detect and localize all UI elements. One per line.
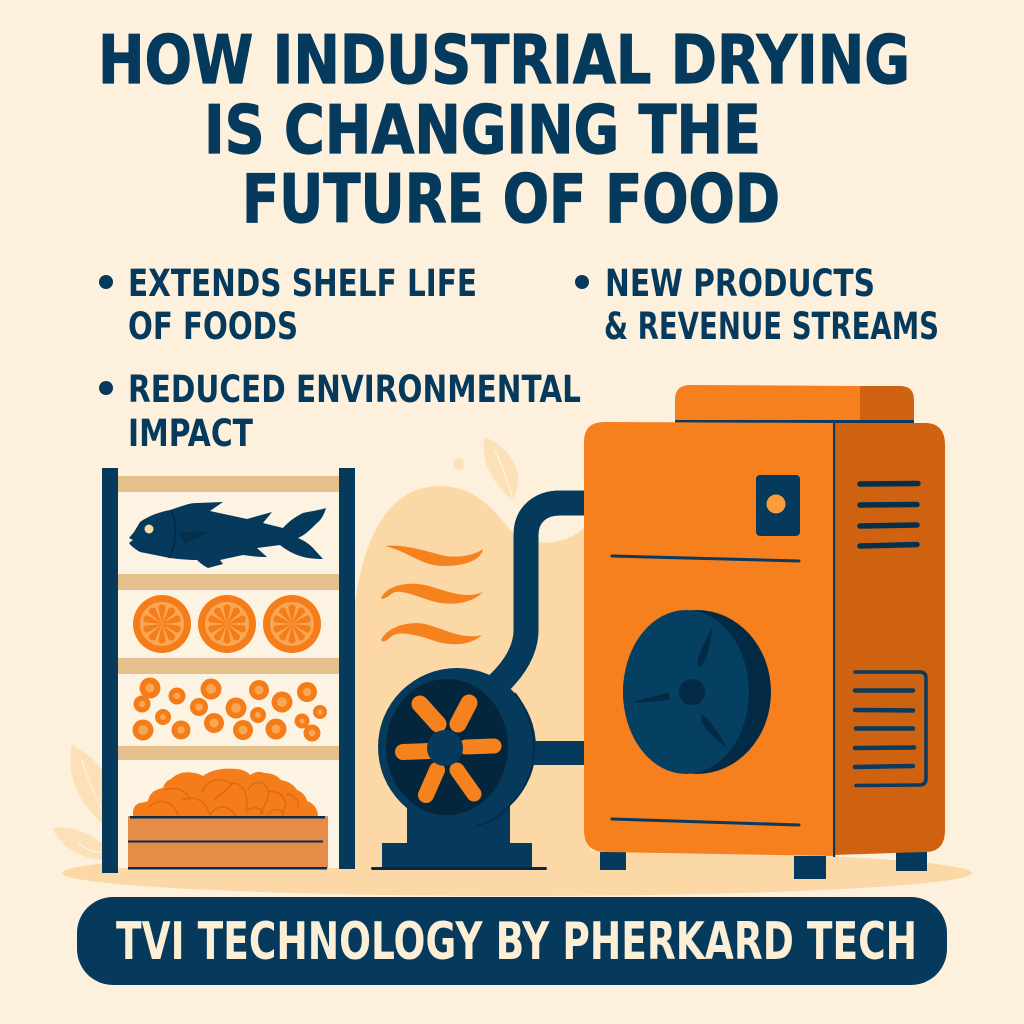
machine feet: [600, 852, 927, 879]
side vents upper: [860, 484, 918, 546]
title: [98, 21, 910, 238]
footer banner: [77, 897, 947, 985]
title: IS CHANGING THE: [204, 91, 761, 169]
air flow waves: [381, 546, 483, 644]
dried orange slices: [133, 595, 321, 653]
front fan: [623, 610, 771, 774]
panel lines: [612, 556, 799, 825]
title: FUTURE OF FOOD: [242, 160, 780, 238]
bullet: new products: [575, 262, 939, 348]
fish: [129, 502, 326, 568]
bullet: reduced environmental impact: IMPACT: [128, 412, 254, 455]
top housing: [675, 385, 914, 423]
centrifugal fan: [371, 668, 547, 870]
dryer machine: [584, 385, 945, 879]
bullet: extends shelf life: EXTENDS SHELF LIFE: [128, 262, 477, 305]
floor shadow: [62, 850, 972, 896]
wooden crate: [128, 816, 328, 870]
drying rack: [102, 468, 355, 873]
bullet: extends shelf life: OF FOODS: [128, 305, 298, 348]
bullet: reduced environmental impact: [99, 368, 581, 455]
dried carrot rounds: [132, 678, 327, 742]
control box: [756, 475, 800, 536]
side vents lower: [855, 672, 926, 786]
ducting pipes: [497, 503, 585, 765]
bullet: new products: NEW PRODUCTS: [605, 262, 875, 305]
bullet: extends shelf life: [99, 262, 477, 348]
warm air blob: [355, 486, 590, 875]
machine body: [584, 422, 834, 856]
background leaves: [52, 437, 518, 862]
food pile: [133, 769, 318, 817]
bullet: reduced environmental impact: REDUCED ENVIRONMENTAL: [128, 368, 581, 411]
